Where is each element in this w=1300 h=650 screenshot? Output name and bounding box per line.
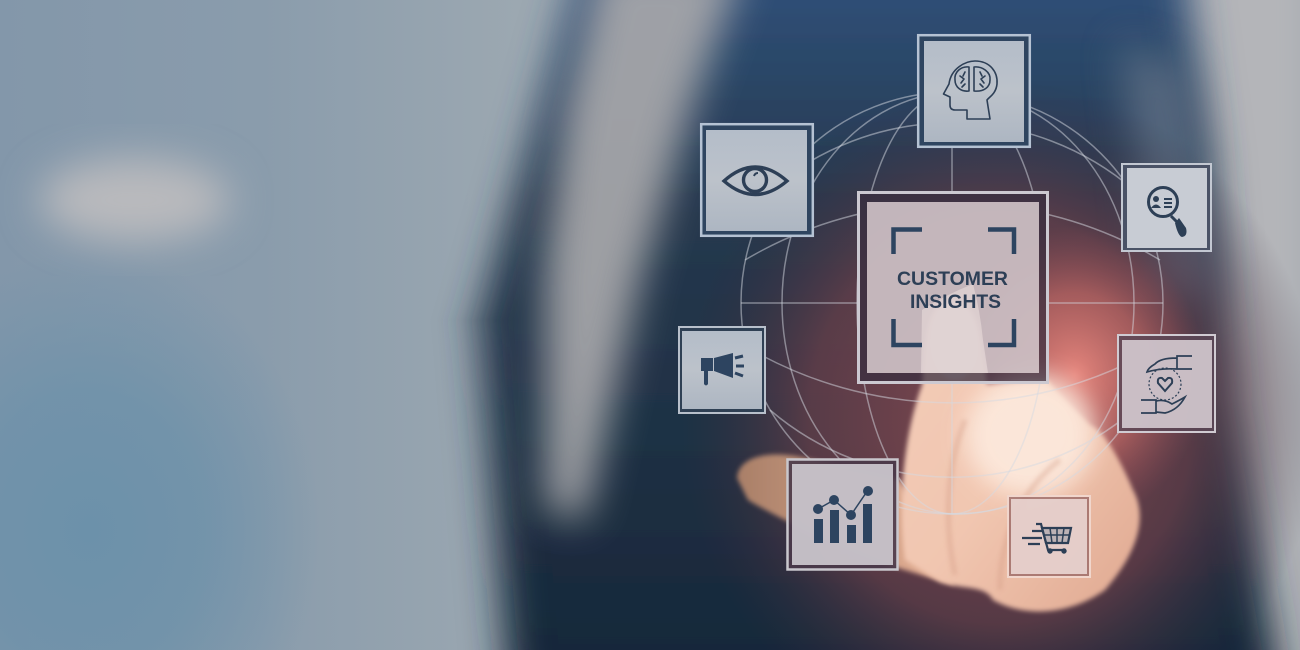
bar and line chart: [813, 486, 873, 543]
panel: brain: [918, 35, 1030, 147]
panel: customer search: [1122, 164, 1211, 251]
heading: CUSTOMER: [897, 269, 1008, 290]
shirt highlight streak: [545, 0, 745, 520]
heading: INSIGHTS: [910, 292, 1001, 313]
icon: megaphone: [701, 353, 744, 386]
icon: head with brain: [944, 61, 997, 119]
panel: shopping cart: [1008, 496, 1090, 577]
panel: caring hands: [1118, 335, 1215, 432]
panel: growth chart: [788, 460, 898, 570]
panel: eye: [701, 124, 813, 236]
heading: [897, 269, 1008, 313]
icon: hands and heart: [1141, 356, 1192, 413]
panel: megaphone: [679, 327, 765, 413]
corner brackets: [894, 230, 1014, 345]
fingertip showing through: [921, 284, 988, 373]
icon: magnifier with profile: [1148, 188, 1186, 237]
hand: [737, 300, 1140, 611]
panel: customer insights: [858, 192, 1048, 382]
icon: eye: [724, 167, 787, 194]
red glow: [680, 80, 1300, 650]
suit: [478, 0, 1275, 650]
globe wireframe: [741, 92, 1163, 514]
icon: shopping cart: [1022, 524, 1071, 553]
